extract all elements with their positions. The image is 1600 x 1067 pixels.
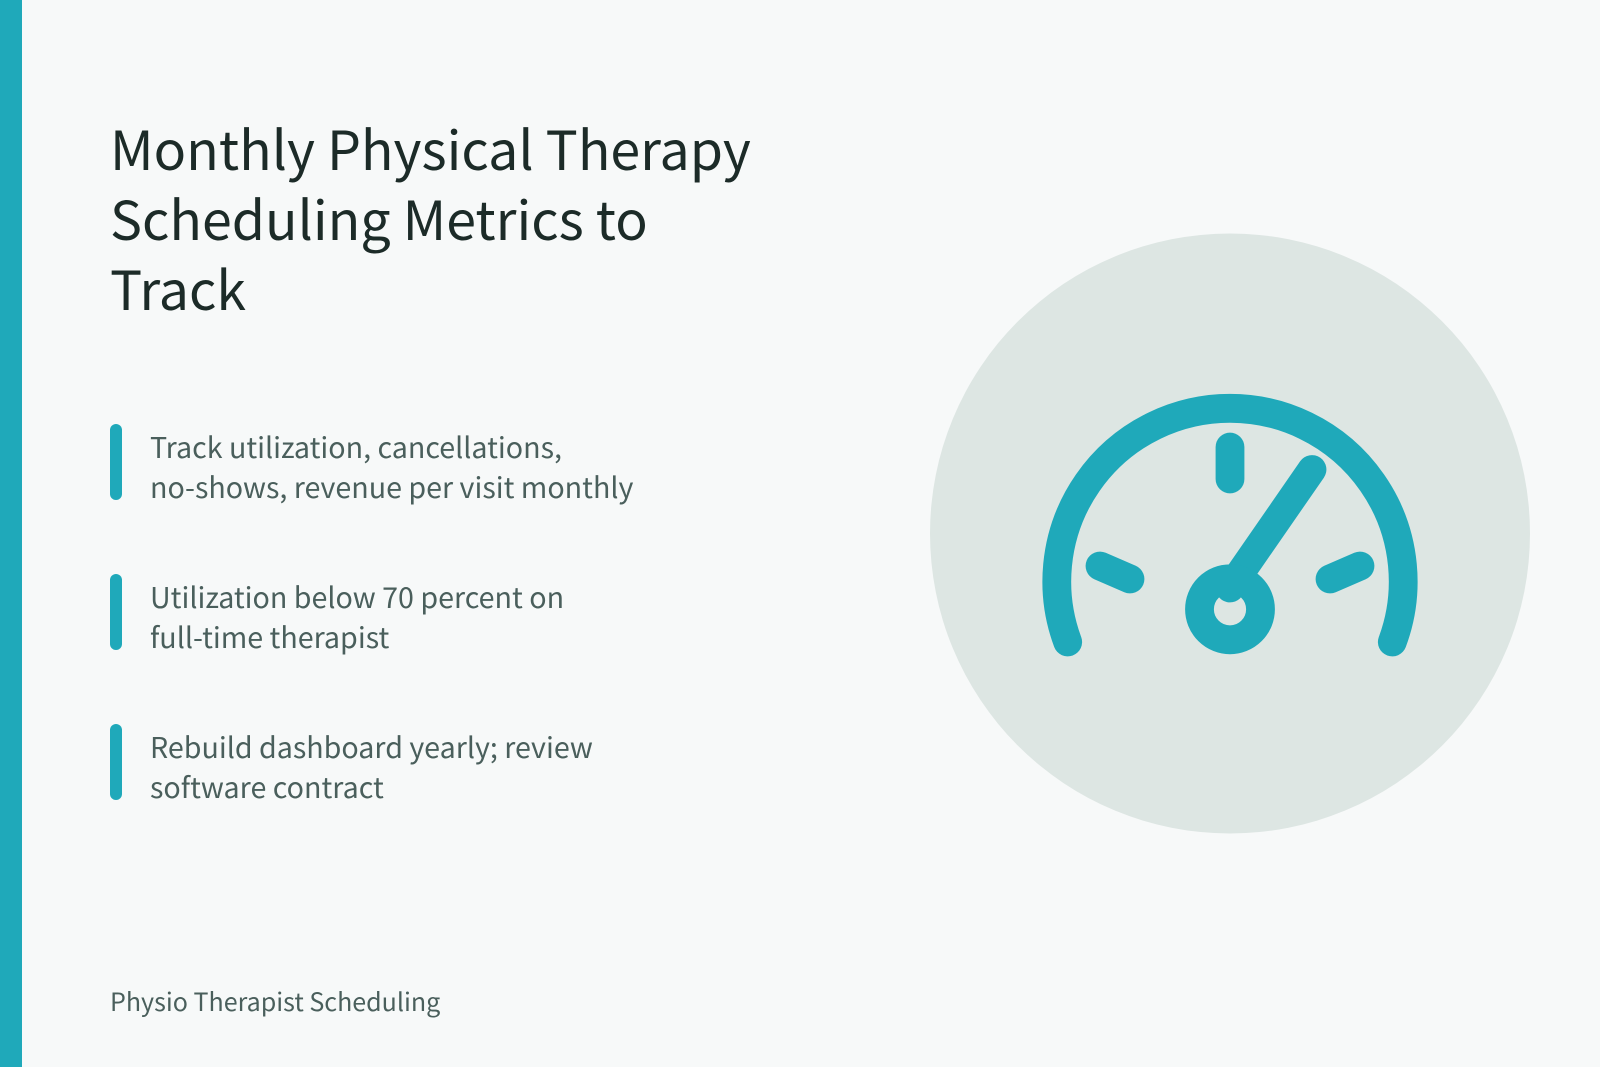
title bbox=[110, 109, 751, 326]
bullet 2 text: full-time therapist bbox=[150, 616, 389, 657]
icon: speedometer gauge bbox=[1057, 408, 1403, 642]
needle bbox=[1230, 470, 1312, 588]
bullet 1: marker and text bbox=[110, 424, 633, 507]
bullet 1 text: no-shows, revenue per visit monthly bbox=[150, 466, 633, 507]
gauge arc bbox=[1057, 408, 1403, 642]
top tick bbox=[1216, 447, 1244, 479]
bullet 3: marker and text bbox=[110, 724, 593, 807]
title: Scheduling Metrics to bbox=[110, 179, 648, 256]
bullet 1 marker bbox=[110, 424, 122, 500]
title: Track bbox=[110, 249, 246, 326]
bullet 2 text bbox=[150, 576, 564, 657]
background circle bbox=[930, 234, 1530, 834]
bullet 3 text: software contract bbox=[150, 766, 384, 807]
footer label: Physio Therapist Scheduling bbox=[110, 983, 440, 1019]
bullet 2 marker bbox=[110, 574, 122, 650]
hub ring bbox=[1200, 579, 1260, 640]
bullet 3 text bbox=[150, 726, 593, 807]
bullet 3 marker bbox=[110, 724, 122, 800]
bullet 1 text bbox=[150, 426, 633, 507]
bullet 3 text: Rebuild dashboard yearly; review bbox=[150, 726, 593, 767]
left tick bbox=[1100, 566, 1130, 579]
bullet 1 text: Track utilization, cancellations, bbox=[150, 426, 562, 467]
bullet 2: marker and text bbox=[110, 574, 564, 657]
title: Monthly Physical Therapy bbox=[110, 109, 751, 186]
left accent stripe bbox=[0, 0, 22, 1067]
bullet 2 text: Utilization below 70 percent on bbox=[150, 576, 564, 617]
right tick bbox=[1330, 566, 1360, 579]
